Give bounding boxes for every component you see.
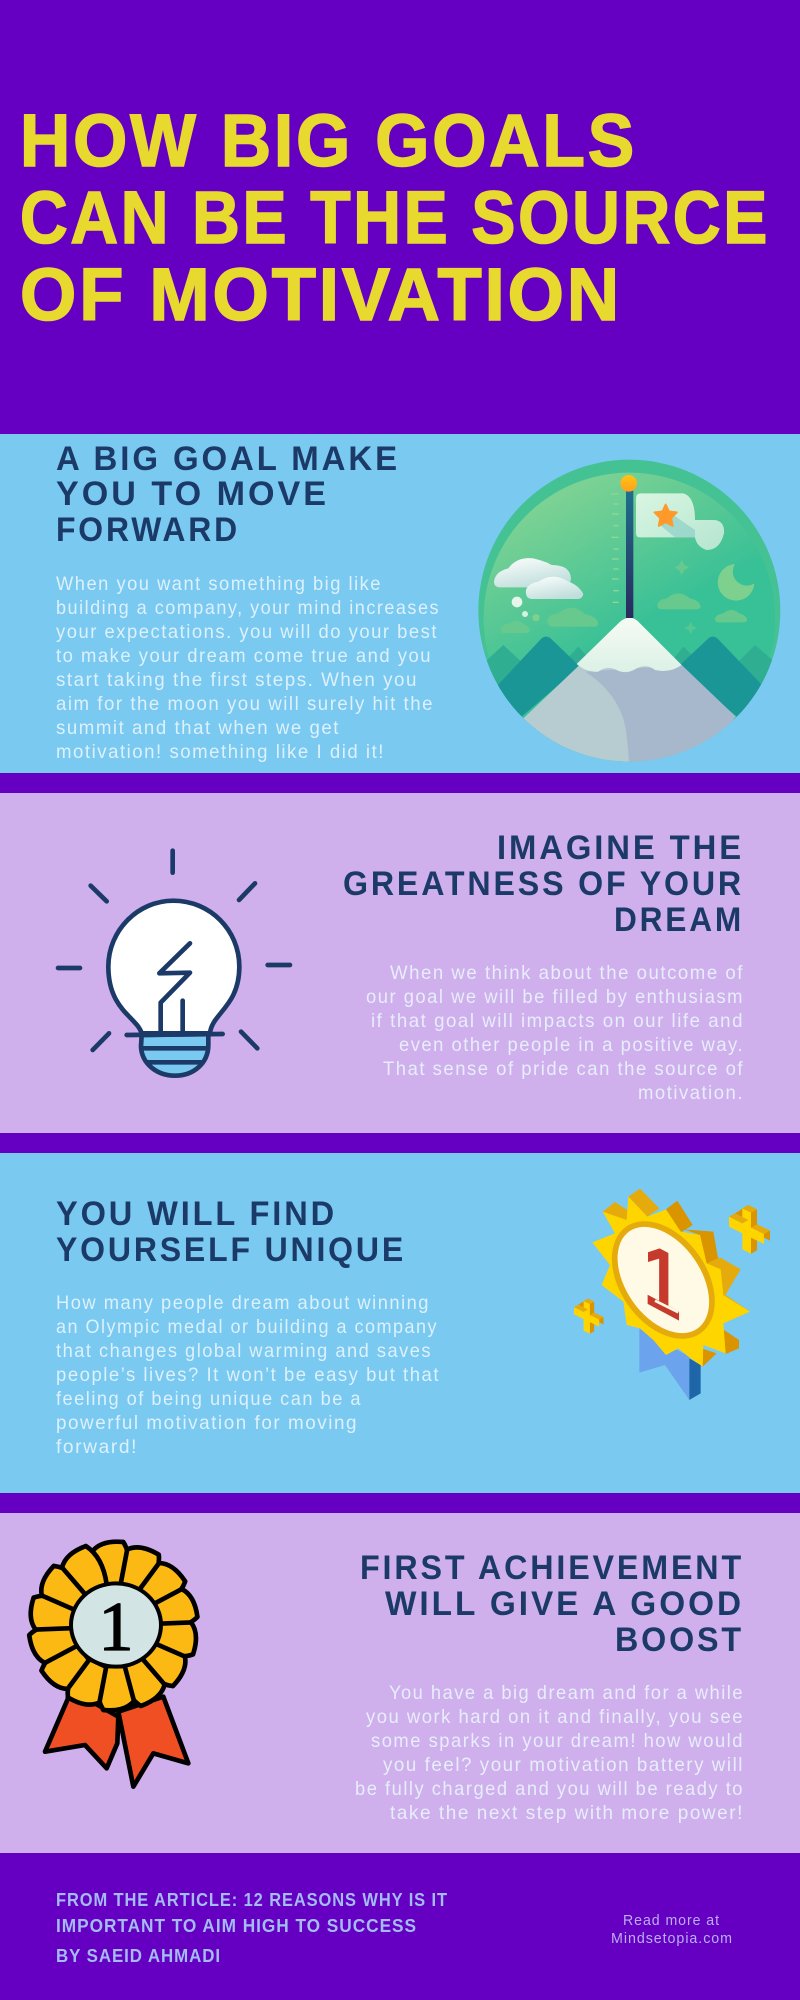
footer link: Mindsetopia.com xyxy=(611,1930,733,1947)
text block: imagine the greatness xyxy=(366,962,744,1104)
text block: find yourself unique: How many people dream about winning xyxy=(56,1292,430,1314)
text block: first achievement: you work hard on it and finally, you see xyxy=(366,1706,744,1728)
text block: first achievement: take the next step with more power! xyxy=(390,1802,744,1824)
text block: a big goal: building a company, your mind increases xyxy=(56,597,440,619)
text block: a big goal: aim for the moon you will surely hit the xyxy=(56,693,434,715)
text block: first achievement: you feel? your motivation battery will xyxy=(383,1754,744,1776)
text block: imagine the greatness: That sense of pride can the source of xyxy=(383,1058,744,1080)
footer credit xyxy=(56,1890,448,1966)
footer xyxy=(0,1853,800,2000)
text block: a big goal: summit and that when we get xyxy=(56,717,340,739)
footer link xyxy=(611,1912,733,1947)
heading: first achievement: WILL GIVE A GOOD xyxy=(385,1585,744,1623)
heading: a big goal: YOU TO MOVE xyxy=(56,475,329,513)
text block: find yourself unique: powerful motivation for moving xyxy=(56,1412,358,1434)
divider band xyxy=(0,1493,800,1513)
text block: first achievement: be fully charged and you will be ready to xyxy=(355,1778,744,1800)
text block: first achievement xyxy=(355,1682,744,1824)
text block: a big goal: to make your dream come true and you xyxy=(56,645,432,667)
footer credit: FROM THE ARTICLE: 12 REASONS WHY IS IT xyxy=(56,1890,448,1910)
heading: a big goal: A BIG GOAL MAKE xyxy=(56,440,400,478)
text block: find yourself unique xyxy=(56,1292,440,1458)
text block: imagine the greatness: When we think about the outcome of xyxy=(390,962,744,984)
text block: find yourself unique: people’s lives? It won’t be easy but that xyxy=(56,1364,440,1386)
title: HOW BIG GOALS xyxy=(20,99,637,182)
heading: a big goal xyxy=(56,440,400,549)
title xyxy=(20,99,770,336)
heading: first achievement: FIRST ACHIEVEMENT xyxy=(360,1549,744,1587)
heading: first achievement: BOOST xyxy=(615,1621,744,1659)
text block: first achievement: some sparks in your dream! how would xyxy=(371,1730,744,1752)
text block: find yourself unique: that changes global warming and saves xyxy=(56,1340,432,1362)
heading: imagine the greatness xyxy=(343,829,744,939)
footer credit: IMPORTANT TO AIM HIGH TO SUCCESS xyxy=(56,1916,417,1936)
heading: find yourself unique: YOU WILL FIND xyxy=(56,1195,337,1233)
footer link: Read more at xyxy=(623,1912,720,1929)
text block: imagine the greatness: even other people in a positive way. xyxy=(399,1034,744,1056)
title: OF MOTIVATION xyxy=(20,253,622,336)
text block: a big goal xyxy=(56,573,440,763)
icon: isometric medal xyxy=(574,1189,770,1400)
divider band xyxy=(0,773,800,793)
footer credit: BY SAEID AHMADI xyxy=(56,1946,221,1966)
heading: first achievement xyxy=(360,1549,744,1659)
text block: imagine the greatness: motivation. xyxy=(638,1082,744,1104)
icon: rosette ribbon: 1 xyxy=(98,1589,133,1666)
divider band xyxy=(0,1133,800,1153)
text block: find yourself unique: feeling of being unique can be a xyxy=(56,1388,362,1410)
panel: find yourself unique xyxy=(0,1153,800,1493)
text block: a big goal: start taking the first steps. When you xyxy=(56,669,418,691)
icon: light bulb xyxy=(58,851,290,1076)
icon: mountain summit with flag xyxy=(478,460,780,770)
text block: imagine the greatness: if that goal will impacts on our life and xyxy=(371,1010,744,1032)
text block: find yourself unique: an Olympic medal or building a company xyxy=(56,1316,438,1338)
icon: isometric medal: 1 xyxy=(643,1220,681,1341)
panel: first achievement xyxy=(0,1513,800,1853)
heading: find yourself unique: YOURSELF UNIQUE xyxy=(56,1231,406,1269)
panel: imagine the greatness xyxy=(0,793,800,1133)
heading: imagine the greatness: IMAGINE THE xyxy=(497,829,744,867)
heading: a big goal: FORWARD xyxy=(56,511,240,549)
text block: a big goal: When you want something big like xyxy=(56,573,382,595)
header banner xyxy=(0,0,800,434)
text block: imagine the greatness: our goal we will be filled by enthusiasm xyxy=(366,986,744,1008)
heading: imagine the greatness: GREATNESS OF YOUR xyxy=(343,865,744,903)
text block: find yourself unique: forward! xyxy=(56,1436,138,1458)
heading: find yourself unique xyxy=(56,1195,406,1269)
panel: a big goal xyxy=(0,434,800,773)
text block: first achievement: You have a big dream and for a while xyxy=(389,1682,744,1704)
heading: imagine the greatness: DREAM xyxy=(614,901,744,939)
icon: rosette ribbon xyxy=(27,1541,200,1787)
text block: a big goal: your expectations. you will do your best xyxy=(56,621,438,643)
text block: a big goal: motivation! something like I did it! xyxy=(56,741,385,763)
